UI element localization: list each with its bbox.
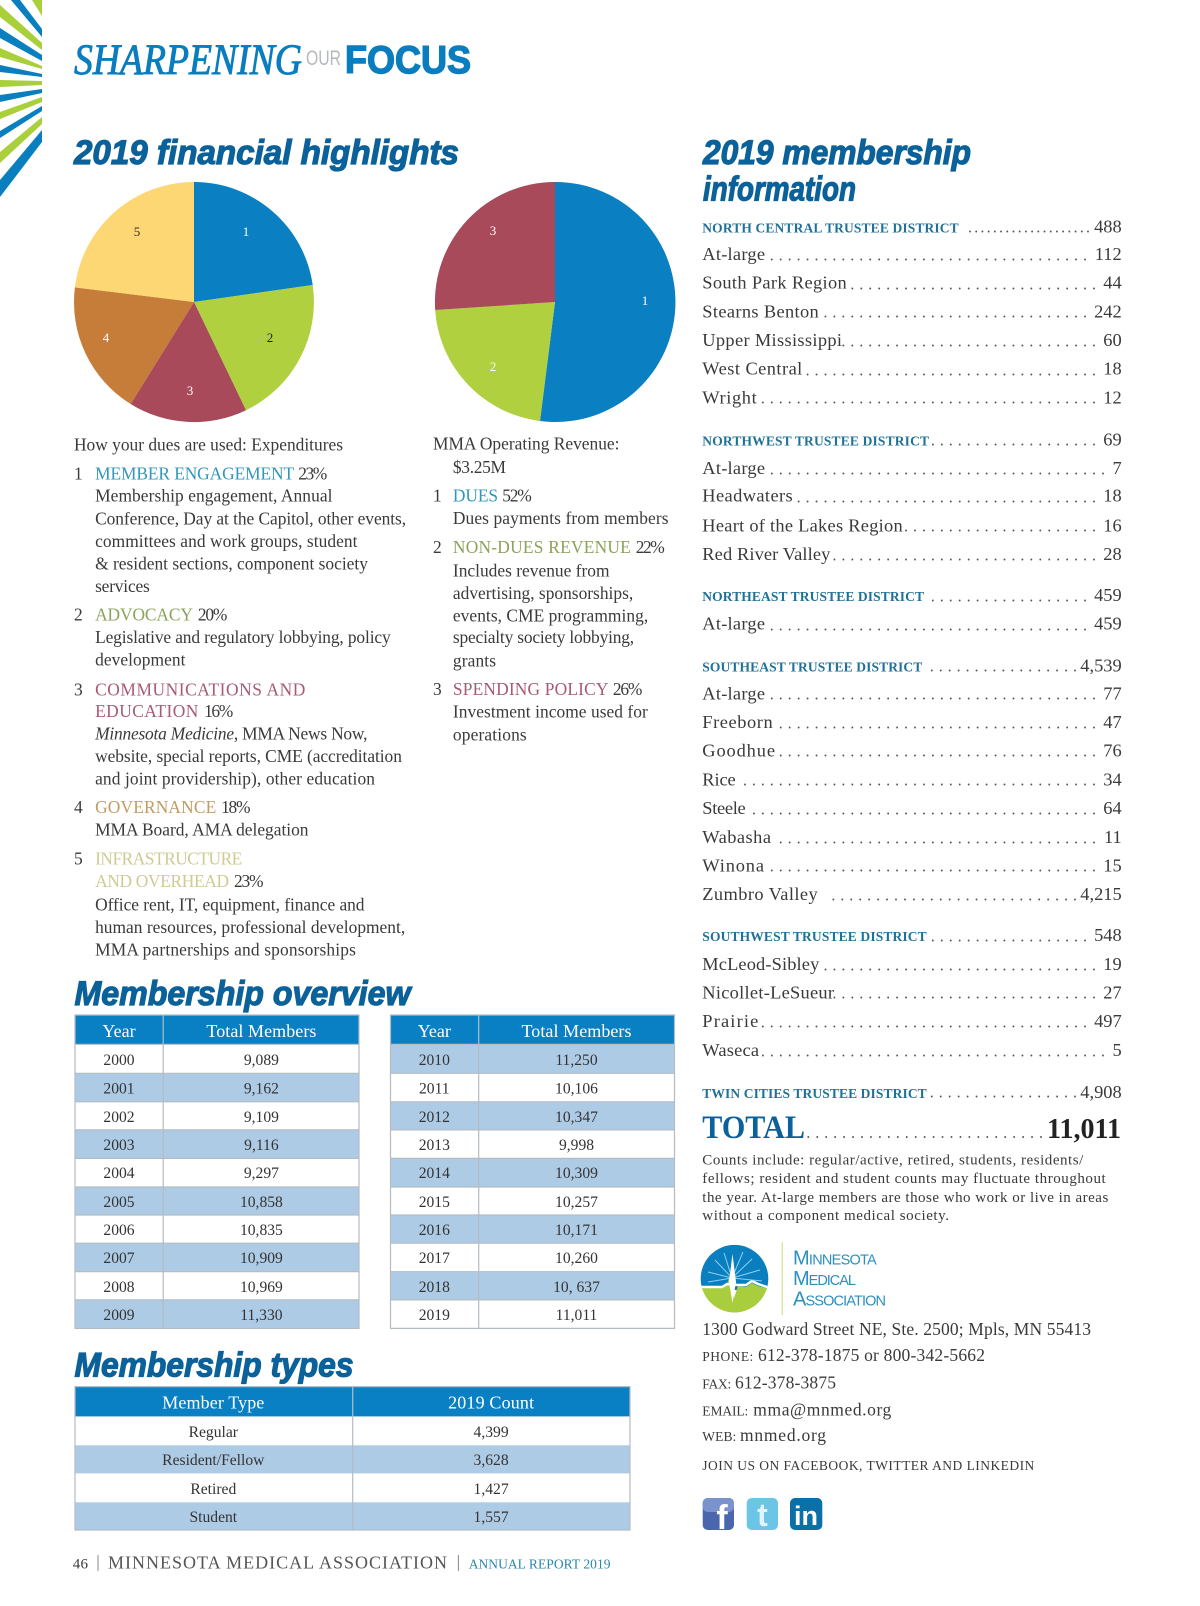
text block: how your dues are used: 16% <box>204 701 233 721</box>
text block: how your dues are used: MMA Board, AMA delegation <box>95 820 309 840</box>
list: Northeast district: 459 <box>1094 614 1122 634</box>
list: Southeast district: 4,539 <box>1080 656 1122 676</box>
list: Southwest district: Prairie <box>702 1011 758 1031</box>
table: membership 2010-2019: 11,250 <box>555 1052 598 1069</box>
text block: how your dues are used: development <box>95 650 186 670</box>
pie chart: revenue: 3 <box>490 223 496 238</box>
table: membership 2000-2009: 2006 <box>103 1222 135 1239</box>
table: membership 2000-2009: 10,858 <box>240 1194 283 1211</box>
list: Southeast district: 11 <box>1104 827 1122 847</box>
text block: operating revenue: events, CME programming, <box>453 605 648 625</box>
table: membership 2000-2009: 9,109 <box>244 1109 279 1126</box>
list: Southeast district: At-large <box>702 683 765 703</box>
decorative sunburst <box>0 0 42 197</box>
text block: how your dues are used: Legislative and regulatory lobbying, policy <box>95 627 391 647</box>
icon: twitter: t <box>757 1497 768 1533</box>
pie chart: expenditures: 4 <box>103 330 110 345</box>
list: Southeast district: Steele <box>702 798 746 818</box>
icon: linkedin: in <box>794 1501 818 1531</box>
text block: how your dues are used: 23% <box>298 463 327 483</box>
icon: facebook: f <box>716 1499 728 1537</box>
footer <box>73 1553 611 1573</box>
list: North Central district: 60 <box>1103 330 1122 350</box>
icon: twitter <box>747 1497 778 1533</box>
table: membership 2000-2009 <box>75 1015 359 1328</box>
contact details: PHONE: <box>702 1349 753 1364</box>
contact details: 612-378-1875 or 800-342-5662 <box>758 1345 985 1365</box>
list: North Central district: 112 <box>1095 244 1122 264</box>
list: North Central district: Wright <box>702 387 757 407</box>
table: membership 2000-2009: 10,835 <box>240 1222 283 1239</box>
pie chart: expenditures: 3 <box>187 383 193 398</box>
list: Southeast district: 47 <box>1103 712 1122 732</box>
list: Northeast district: 459 <box>1094 585 1122 605</box>
logo: Minnesota Medical Association: MEDICAL <box>793 1268 856 1290</box>
text block: how your dues are used: 20% <box>198 605 227 625</box>
table: membership 2000-2009: 2001 <box>103 1080 135 1098</box>
contact details: EMAIL: <box>702 1404 748 1419</box>
text block: how your dues are used: MEMBER ENGAGEMENT <box>95 463 294 483</box>
list: Southeast district: 4,215 <box>1080 884 1122 904</box>
text block: operating revenue <box>433 433 669 744</box>
table: membership types: Resident/Fellow <box>162 1452 265 1469</box>
text block: how your dues are used: GOVERNANCE <box>95 797 216 817</box>
table: membership 2000-2009: 2004 <box>103 1165 135 1182</box>
table: membership 2010-2019: 10,260 <box>555 1250 598 1267</box>
list: North Central district: At-large <box>702 244 765 264</box>
table: membership 2010-2019: 9,998 <box>559 1137 594 1154</box>
text block: operating revenue: $3.25M <box>453 457 506 477</box>
text block: how your dues are used: 2 <box>74 605 83 625</box>
table: membership types: 3,628 <box>474 1452 509 1469</box>
list: North Central district: Upper Mississippi <box>702 330 842 350</box>
list: Southeast district: 34 <box>1103 769 1122 789</box>
text block: how your dues are used <box>74 435 406 960</box>
list: Southeast district: SOUTHEAST TRUSTEE DISTRICT <box>702 660 922 675</box>
table: membership types: Member Type <box>162 1392 264 1412</box>
footer: ANNUAL REPORT 2019 <box>469 1557 611 1572</box>
list: Southwest district <box>702 925 1122 1060</box>
list: Northwest district: 28 <box>1103 544 1122 564</box>
heading: 2019 financial highlights: 2019 financial highlights <box>73 134 459 172</box>
text block: operating revenue: Investment income used for <box>453 702 648 722</box>
text block: how your dues are used: and joint providership), other education <box>95 769 375 789</box>
table: membership 2010-2019 <box>390 1015 674 1328</box>
text block: how your dues are used: MMA partnerships and sponsorships <box>95 940 356 960</box>
pie chart: revenue: 1 <box>642 293 648 308</box>
heading: 2019 membership information: information <box>703 171 856 209</box>
text block: how your dues are used: committees and work groups, student <box>95 531 358 551</box>
table: membership 2000-2009: 9,089 <box>244 1052 279 1069</box>
list: Twin Cities district <box>702 1082 1122 1102</box>
text block: how your dues are used: EDUCATION <box>95 701 199 721</box>
page title: OUR <box>306 47 341 70</box>
list: North Central district: NORTH CENTRAL TRUSTEE DISTRICT <box>702 220 959 235</box>
list: North Central district: West Central <box>702 359 802 379</box>
table: membership 2010-2019: 2010 <box>419 1052 450 1069</box>
contact details: 612-378-3875 <box>735 1372 836 1392</box>
table: membership 2000-2009: 2007 <box>103 1250 135 1267</box>
table: membership 2010-2019: 2019 <box>419 1307 450 1324</box>
text block: how your dues are used: AND OVERHEAD <box>95 871 229 891</box>
text block: operating revenue: advertising, sponsorships, <box>453 583 633 603</box>
text block: operating revenue: NON-DUES REVENUE <box>453 537 631 557</box>
contact details: WEB: <box>702 1429 736 1444</box>
list: Northwest district: Heart of the Lakes Region <box>702 515 903 535</box>
text block: operating revenue: 26% <box>613 679 642 699</box>
table: membership 2000-2009: 2008 <box>103 1279 135 1296</box>
table: membership 2000-2009: 2009 <box>103 1307 135 1324</box>
heading: Membership types: Membership types <box>74 1347 354 1385</box>
logo: Minnesota Medical Association <box>700 1242 886 1315</box>
text block: how your dues are used: 23% <box>234 871 264 891</box>
list: Southwest district: 497 <box>1094 1011 1122 1031</box>
table: membership 2010-2019: 10,347 <box>555 1109 598 1126</box>
note: the year. At-large members are those who work or live in areas <box>702 1190 1108 1206</box>
table: membership 2010-2019: 10,171 <box>555 1222 598 1239</box>
table: membership 2010-2019: 11,011 <box>556 1307 597 1324</box>
pie chart: expenditures: 5 <box>134 224 140 239</box>
text block: how your dues are used: website, special reports, CME (accreditation <box>95 746 402 766</box>
text block: operating revenue: MMA Operating Revenue: <box>433 433 620 453</box>
list: Northwest district: At-large <box>702 458 765 478</box>
list: North Central district: Stearns Benton <box>702 301 819 321</box>
text block: how your dues are used: 5 <box>74 848 83 868</box>
table: membership types: 2019 Count <box>448 1392 534 1412</box>
table: membership types: Student <box>189 1509 238 1526</box>
text block: how your dues are used: & resident sections, component society <box>95 553 368 573</box>
list: Southeast district: Goodhue <box>702 741 775 761</box>
list: Southwest district: 5 <box>1112 1040 1122 1060</box>
list: Southwest district: 548 <box>1094 925 1122 945</box>
list: Northwest district <box>702 429 1122 564</box>
table: membership 2000-2009: 9,162 <box>244 1080 279 1098</box>
list: Southwest district: 19 <box>1103 954 1122 974</box>
contact details: FAX: <box>702 1376 731 1391</box>
page title: SHARPENING <box>74 37 302 84</box>
pie chart: revenue: 2 <box>490 359 496 374</box>
list: North Central district: 18 <box>1103 359 1122 379</box>
list: North Central district: 12 <box>1103 387 1122 407</box>
logo: Minnesota Medical Association: ASSOCIATION <box>793 1289 886 1311</box>
contact details: mnmed.org <box>740 1425 826 1445</box>
list: Northwest district: 7 <box>1112 458 1122 478</box>
text block: how your dues are used: services <box>95 576 150 596</box>
text block: how your dues are used: COMMUNICATIONS AND <box>95 679 305 699</box>
list: Southeast district: Zumbro Valley <box>702 884 818 904</box>
table: membership 2000-2009: 2002 <box>103 1109 135 1126</box>
table: membership types: 1,427 <box>474 1481 509 1498</box>
table: membership 2010-2019: 2011 <box>419 1080 450 1098</box>
table: membership 2000-2009: Year <box>102 1021 136 1041</box>
list: Northeast district: At-large <box>702 614 765 634</box>
page title: FOCUS <box>345 39 471 82</box>
list: Southeast district: 77 <box>1103 683 1122 703</box>
list: Southeast district: 64 <box>1103 798 1122 818</box>
list: Northwest district: 69 <box>1103 429 1122 449</box>
list: North Central district: 242 <box>1094 301 1122 321</box>
pie chart: expenditures <box>74 182 314 422</box>
text block: how your dues are used: Minnesota Medicine, MMA News Now, <box>94 723 367 743</box>
total <box>702 1110 1121 1146</box>
text block: operating revenue: 52% <box>502 485 532 505</box>
list: North Central district: South Park Region <box>702 273 847 293</box>
text block: how your dues are used: 4 <box>74 797 83 817</box>
total: 11,011 <box>1047 1113 1121 1145</box>
table: membership 2000-2009: 2003 <box>103 1137 135 1154</box>
text block: operating revenue: 2 <box>433 537 442 557</box>
list: Northwest district: 18 <box>1103 486 1122 506</box>
text block: how your dues are used: Conference, Day at the Capitol, other events, <box>95 508 406 528</box>
list: Southwest district: SOUTHWEST TRUSTEE DISTRICT <box>702 929 927 944</box>
text block: operating revenue: DUES <box>453 485 498 505</box>
list: North Central district: 44 <box>1103 273 1122 293</box>
table: membership 2010-2019: 2015 <box>419 1194 450 1211</box>
list: Northwest district: Red River Valley <box>702 544 831 564</box>
table: membership 2010-2019: 2014 <box>419 1165 450 1182</box>
table: membership 2010-2019: 2017 <box>419 1250 450 1267</box>
footer: 46 <box>73 1557 88 1573</box>
table: membership 2010-2019: 10, 637 <box>553 1279 600 1296</box>
table: membership types: Regular <box>189 1424 239 1441</box>
heading: 2019 membership information <box>702 134 971 209</box>
text block: how your dues are used: 1 <box>74 463 83 483</box>
list: Southwest district: Nicollet-LeSueur <box>702 982 834 1002</box>
text block: how your dues are used: How your dues are used: Expenditures <box>74 435 343 455</box>
table: membership types: Retired <box>190 1481 236 1498</box>
text block: how your dues are used: Membership engagement, Annual <box>95 486 333 506</box>
text block: operating revenue: Includes revenue from <box>453 560 610 580</box>
list: Northeast district: NORTHEAST TRUSTEE DISTRICT <box>702 589 924 604</box>
text block: how your dues are used: INFRASTRUCTURE <box>95 848 242 868</box>
table: membership 2010-2019: 10,309 <box>555 1165 598 1182</box>
text block: how your dues are used: 18% <box>221 797 250 817</box>
table: membership 2010-2019: 2012 <box>419 1109 450 1126</box>
contact details: mma@mnmed.org <box>753 1400 892 1420</box>
table: membership 2000-2009: 9,116 <box>244 1137 279 1154</box>
list: Southeast district <box>702 656 1122 904</box>
icon: facebook <box>703 1498 734 1537</box>
list: Twin Cities district: 4,908 <box>1080 1082 1122 1102</box>
note <box>702 1153 1108 1224</box>
list: Southeast district: 15 <box>1103 855 1122 875</box>
text block: how your dues are used: ADVOCACY <box>95 605 193 625</box>
table: membership 2000-2009: 2005 <box>103 1194 135 1211</box>
pie chart: revenue <box>435 182 675 422</box>
list: Southwest district: McLeod-Sibley <box>702 954 820 974</box>
text block: operating revenue: grants <box>453 650 496 670</box>
table: membership 2010-2019: 2018 <box>419 1279 450 1296</box>
table: membership 2010-2019: Total Members <box>522 1021 632 1041</box>
page title <box>74 37 471 84</box>
table: membership types <box>75 1387 630 1530</box>
heading: 2019 membership information: 2019 membership <box>702 134 971 172</box>
contact details: 1300 Godward Street NE, Ste. 2500; Mpls, MN 55413 <box>702 1319 1091 1339</box>
list: Southwest district: Waseca <box>702 1040 759 1060</box>
table: membership 2010-2019: 10,106 <box>555 1080 598 1098</box>
list: Northwest district: 16 <box>1103 515 1122 535</box>
list: Southeast district: Freeborn <box>702 712 773 732</box>
list: Northeast district <box>702 585 1122 634</box>
contact details <box>702 1319 1091 1473</box>
note: without a component medical society. <box>702 1208 949 1224</box>
list: North Central district <box>702 216 1122 407</box>
list: Northwest district: NORTHWEST TRUSTEE DISTRICT <box>702 433 929 448</box>
table: membership 2010-2019: 2016 <box>419 1222 450 1239</box>
table: membership types: 1,557 <box>474 1509 509 1526</box>
table: membership 2000-2009: 10,909 <box>240 1250 283 1267</box>
table: membership 2000-2009: Total Members <box>206 1021 316 1041</box>
note: fellows; resident and student counts may fluctuate throughout <box>702 1171 1107 1187</box>
text block: how your dues are used: human resources, professional development, <box>95 917 405 937</box>
text block: operating revenue: operations <box>453 724 527 744</box>
text block: operating revenue: 22% <box>636 537 665 557</box>
logo: Minnesota Medical Association: MINNESOTA <box>793 1247 877 1269</box>
table: membership 2000-2009: 10,969 <box>240 1279 283 1296</box>
text block: operating revenue: SPENDING POLICY <box>453 679 609 699</box>
table: membership 2000-2009: 11,330 <box>240 1307 283 1324</box>
pie chart: expenditures: 2 <box>267 330 273 345</box>
list: Southeast district: Rice <box>702 769 736 789</box>
list: Southeast district: Winona <box>702 855 764 875</box>
pie chart: expenditures: 1 <box>243 224 249 239</box>
total: TOTAL <box>702 1110 805 1146</box>
table: membership 2010-2019: 10,257 <box>555 1194 598 1211</box>
table: membership 2010-2019: Year <box>418 1021 451 1041</box>
table: membership types: 4,399 <box>474 1424 509 1441</box>
text block: operating revenue: 3 <box>433 679 442 699</box>
text block: operating revenue: specialty society lobbying, <box>453 627 634 647</box>
text block: operating revenue: 1 <box>433 485 442 505</box>
heading: Membership overview: Membership overview <box>74 975 413 1013</box>
footer: MINNESOTA MEDICAL ASSOCIATION <box>108 1553 447 1573</box>
list: Southeast district: Wabasha <box>702 827 771 847</box>
list: Twin Cities district: TWIN CITIES TRUSTEE DISTRICT <box>702 1086 927 1101</box>
contact details: JOIN US ON FACEBOOK, TWITTER AND LINKEDIN <box>702 1458 1035 1473</box>
note: Counts include: regular/active, retired, students, residents/ <box>702 1153 1084 1169</box>
text block: how your dues are used: Office rent, IT, equipment, finance and <box>95 895 365 915</box>
list: North Central district: 488 <box>1094 216 1122 236</box>
list: Southwest district: 27 <box>1103 982 1122 1002</box>
text block: operating revenue: Dues payments from members <box>453 508 669 528</box>
table: membership 2010-2019: 2013 <box>419 1137 450 1154</box>
list: Northwest district: Headwaters <box>702 486 793 506</box>
table: membership 2000-2009: 2000 <box>103 1052 135 1069</box>
text block: how your dues are used: 3 <box>74 679 83 699</box>
list: Southeast district: 76 <box>1103 741 1122 761</box>
icon: linkedin <box>790 1498 822 1531</box>
table: membership 2000-2009: 9,297 <box>244 1165 279 1182</box>
